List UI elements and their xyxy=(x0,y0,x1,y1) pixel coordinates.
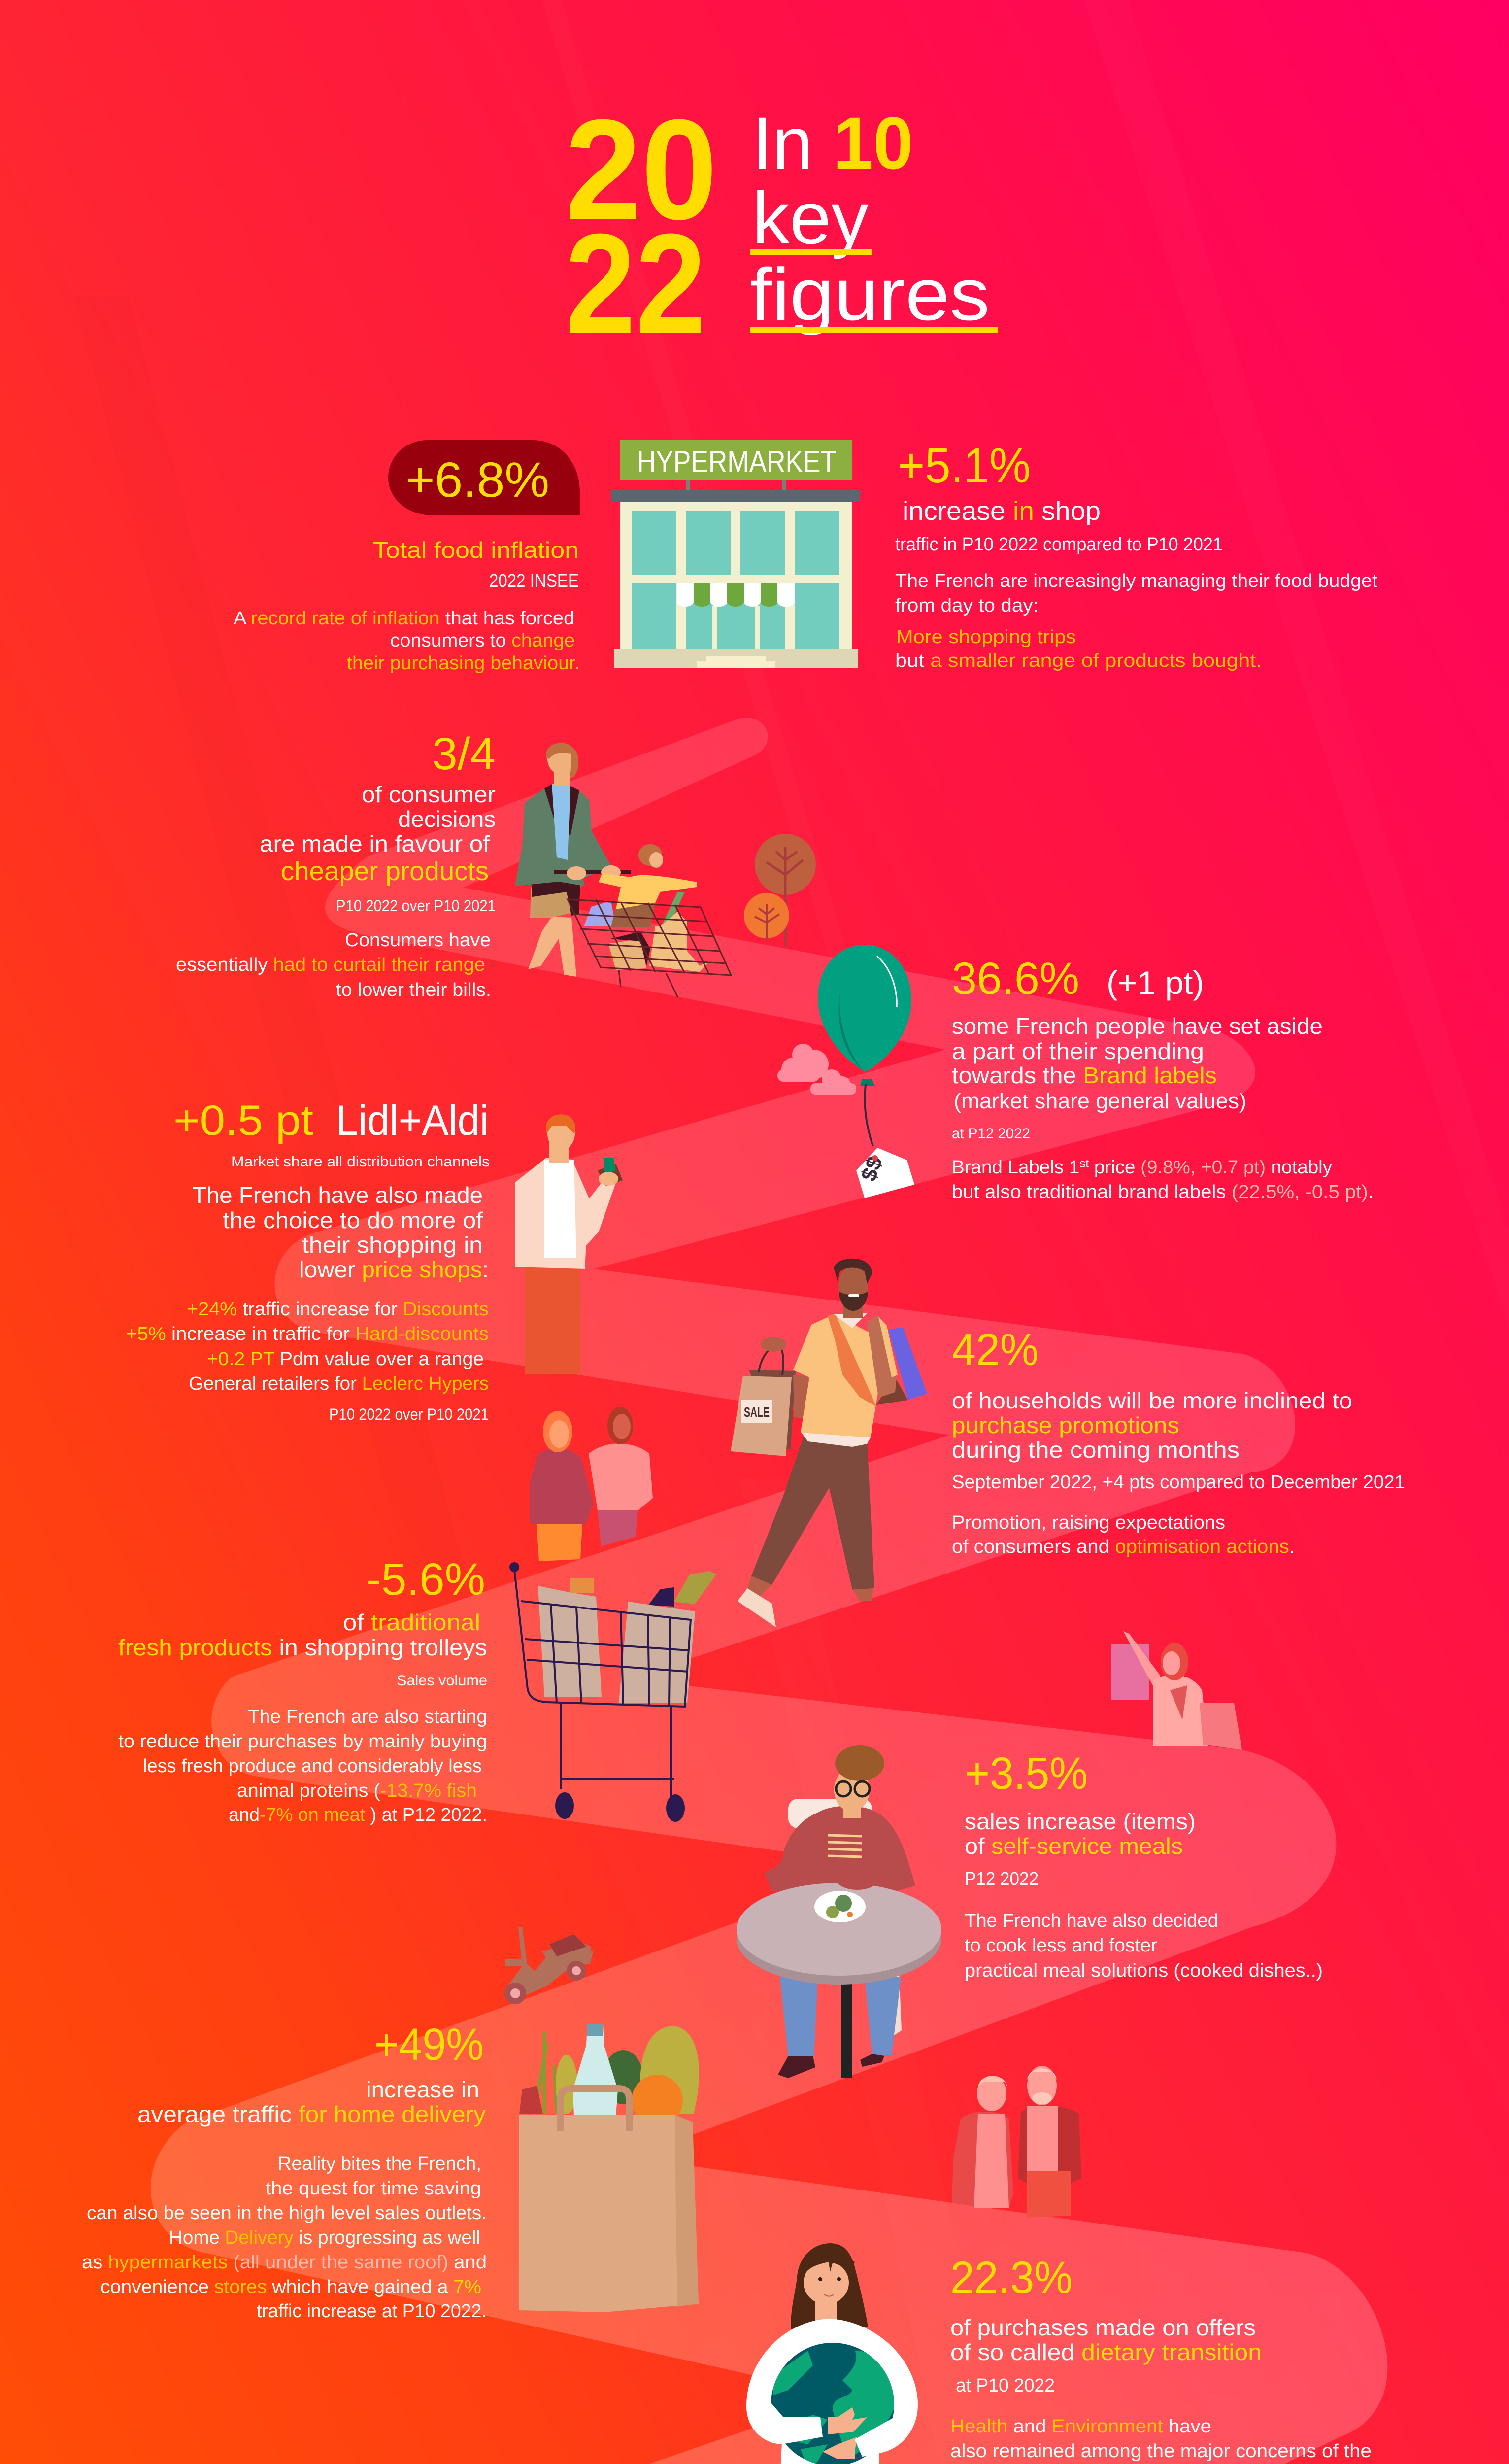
panel: home delivery: Reality bites the French, xyxy=(278,2154,481,2174)
illustration: man with shopping bags: SALE xyxy=(744,1404,770,1420)
panel: dietary transition: Health and Environment have xyxy=(950,2416,1211,2437)
panel: food inflation: Total food inflation xyxy=(373,537,579,563)
icon: hypermarket building xyxy=(611,440,860,668)
panel: brand labels: some French people have set aside xyxy=(952,1013,1323,1039)
panel: dietary transition: of purchases made on offers xyxy=(950,2315,1256,2340)
panel: home delivery: the quest for time saving xyxy=(266,2178,481,2199)
panel: brand labels: (9.8%, +0.7 pt) notably xyxy=(1140,1157,1331,1178)
panel: food inflation: 2022 INSEE xyxy=(489,571,579,591)
panel: shop traffic: increase in shop xyxy=(903,496,1101,526)
panel: Lidl and Aldi: lower price shops: xyxy=(299,1257,489,1282)
panel: dietary transition: also remained among the major concerns of the xyxy=(950,2441,1372,2462)
illustration: man with wallet xyxy=(515,1114,623,1374)
title: In 10 xyxy=(752,102,913,184)
panel: purchase promotions: purchase promotions xyxy=(952,1412,1179,1438)
illustration: man eating at table xyxy=(737,1745,941,2078)
illustration: grocery bag xyxy=(519,2024,699,2312)
panel: dietary transition: 22.3% xyxy=(950,2253,1073,2303)
panel: three quarters of consumer decisions: cheaper products xyxy=(281,856,489,886)
panel: brand labels: st xyxy=(1079,1157,1089,1170)
panel: three quarters of consumer decisions: to lower their bills. xyxy=(336,980,491,1000)
panel: brand labels: (market share general values) xyxy=(954,1089,1246,1113)
panel: brand labels xyxy=(952,954,1374,1202)
panel: food inflation xyxy=(234,440,580,674)
title: key xyxy=(752,176,869,259)
panel: food inflation: their purchasing behaviour. xyxy=(347,653,580,674)
panel: purchase promotions: of households will be more inclined to xyxy=(952,1388,1352,1413)
panel: home delivery: Home Delivery is progressing as well xyxy=(169,2227,480,2248)
panel: shop traffic: More shopping trips xyxy=(896,627,1076,648)
panel: Lidl and Aldi: +24% traffic increase for Discounts xyxy=(187,1299,489,1320)
panel: home delivery: as hypermarkets (all under the same roof) and xyxy=(82,2252,487,2273)
panel: traditional fresh products: animal proteins ( -13.7% fish xyxy=(237,1780,477,1801)
illustration: couple xyxy=(530,1407,653,1561)
panel: Lidl and Aldi: +0.2 PT Pdm value over a range xyxy=(207,1349,484,1369)
illustration: man pushing child in cart xyxy=(515,743,731,997)
panel: traditional fresh products: -5.6% xyxy=(366,1554,485,1605)
panel: three quarters of consumer decisions: Consumers have xyxy=(345,930,491,951)
panel: food inflation: A record rate of inflation that has forced xyxy=(234,608,574,629)
panel: shop traffic: from day to day: xyxy=(895,595,1039,616)
illustration: shopping trolley xyxy=(509,1562,716,1822)
panel: three quarters of consumer decisions: 3/4 xyxy=(432,729,496,779)
panel: self-service meals: practical meal solutions (cooked dishes..) xyxy=(965,1960,1323,1981)
panel: traditional fresh products: to reduce their purchases by mainly buying xyxy=(118,1731,487,1752)
title: 22 xyxy=(565,204,706,364)
panel: brand labels: (+1 pt) xyxy=(1107,964,1204,1001)
panel: Lidl and Aldi: Lidl+Aldi xyxy=(336,1097,489,1144)
illustration: green balloon with price tag xyxy=(818,945,915,1198)
panel: three quarters of consumer decisions: decisions xyxy=(398,806,496,832)
illustration: man with shopping bags xyxy=(731,1259,927,1627)
panel: three quarters of consumer decisions: of consumer xyxy=(362,782,496,807)
panel: Lidl and Aldi: The French have also made xyxy=(192,1182,483,1208)
zigzag ribbon path xyxy=(0,718,1387,2464)
panel: brand labels: but also traditional brand labels (22.5%, -0.5 pt) . xyxy=(952,1182,1374,1202)
panel: purchase promotions: September 2022, +4 pts compared to December 2021 xyxy=(952,1472,1405,1493)
panel: brand labels: Brand Labels 1 xyxy=(952,1157,1078,1178)
panel: purchase promotions: of consumers and optimisation actions . xyxy=(952,1537,1295,1557)
title xyxy=(565,90,998,364)
panel: brand labels: 36.6% xyxy=(952,954,1079,1004)
panel: Lidl and Aldi: their shopping in xyxy=(302,1232,483,1258)
panel: three quarters of consumer decisions: essentially had to curtail their range xyxy=(176,955,485,975)
panel: purchase promotions xyxy=(952,1325,1405,1557)
panel: home delivery: increase in xyxy=(366,2077,479,2102)
panel: self-service meals: The French have also decided xyxy=(965,1911,1218,1931)
illustration: woman carrying bags xyxy=(1111,1631,1242,1750)
panel: three quarters of consumer decisions xyxy=(176,729,496,1000)
panel: home delivery: traffic increase at P10 2022. xyxy=(257,2301,487,2322)
panel: traditional fresh products: The French are also starting xyxy=(248,1707,487,1727)
panel: purchase promotions: Promotion, raising expectations xyxy=(952,1512,1225,1533)
panel: shop traffic: traffic in P10 2022 compared to P10 2021 xyxy=(895,534,1223,555)
panel: dietary transition: of so called dietary transition xyxy=(950,2339,1262,2365)
panel: traditional fresh products: less fresh produce and considerably less xyxy=(143,1756,482,1777)
illustration: scooter xyxy=(504,1927,593,2004)
panel: dietary transition xyxy=(950,2253,1372,2464)
panel: traditional fresh products: Sales volume xyxy=(397,1673,487,1689)
panel: self-service meals xyxy=(965,1748,1323,1981)
panel: shop traffic: The French are increasingly managing their food budget xyxy=(895,571,1377,591)
panel: Lidl and Aldi: +0.5 pt xyxy=(173,1097,313,1144)
panel: home delivery: can also be seen in the high level sales outlets. xyxy=(87,2203,487,2224)
illustration: elderly couple xyxy=(952,2066,1081,2218)
panel: traditional fresh products: fresh products in shopping trolleys xyxy=(118,1635,487,1660)
panel: home delivery: average traffic for home delivery xyxy=(137,2101,486,2127)
panel: brand labels: price xyxy=(1089,1157,1140,1178)
panel: food inflation: consumers to change xyxy=(390,630,575,651)
panel: Lidl and Aldi: Market share all distribution channels xyxy=(231,1154,490,1170)
panel: Lidl and Aldi: the choice to do more of xyxy=(223,1207,483,1233)
panel: self-service meals: to cook less and foster xyxy=(965,1935,1157,1956)
icon: hypermarket building: HYPERMARKET xyxy=(637,445,837,479)
panel: home delivery: +49% xyxy=(374,2019,484,2070)
panel: home delivery: convenience stores which have gained a 7% xyxy=(101,2277,481,2297)
panel: purchase promotions: 42% xyxy=(952,1325,1039,1375)
panel: brand labels: towards the Brand labels xyxy=(952,1062,1217,1088)
panel: self-service meals: sales increase (items) xyxy=(965,1809,1196,1834)
panel: Lidl and Aldi: +5% increase in traffic for Hard-discounts xyxy=(126,1324,489,1344)
panel: self-service meals: P12 2022 xyxy=(965,1869,1039,1889)
illustration: clouds xyxy=(777,1044,856,1095)
panel: shop traffic: +5.1% xyxy=(898,438,1031,493)
panel: shop traffic: but a smaller range of products bought. xyxy=(895,650,1262,671)
panel: self-service meals: +3.5% xyxy=(965,1748,1088,1799)
panel: Lidl and Aldi xyxy=(126,1097,490,1423)
panel: brand labels: at P12 2022 xyxy=(952,1126,1030,1142)
panel: food inflation: +6.8% xyxy=(405,452,549,508)
panel: three quarters of consumer decisions: are made in favour of xyxy=(260,831,490,856)
panel: Lidl and Aldi: General retailers for Leclerc Hypers xyxy=(189,1373,489,1394)
title: figures xyxy=(750,253,990,336)
panel: self-service meals: of self-service meals xyxy=(965,1833,1183,1859)
title: 20 xyxy=(565,90,717,249)
panel: home delivery xyxy=(82,2019,487,2322)
panel: brand labels: a part of their spending xyxy=(952,1038,1204,1064)
panel: purchase promotions: during the coming months xyxy=(952,1437,1240,1463)
panel: three quarters of consumer decisions: P10 2022 over P10 2021 xyxy=(336,897,496,915)
panel: traditional fresh products xyxy=(118,1554,487,1825)
illustration: woman hugging globe xyxy=(746,2243,918,2464)
panel: dietary transition: at P10 2022 xyxy=(956,2375,1055,2396)
illustration: green balloon with price tag: $$ xyxy=(856,1154,887,1184)
panel: shop traffic xyxy=(895,438,1377,671)
panel: Lidl and Aldi: P10 2022 over P10 2021 xyxy=(329,1405,489,1423)
illustration: autumn trees xyxy=(744,834,816,946)
panel: traditional fresh products: of traditional xyxy=(343,1609,480,1635)
panel: traditional fresh products: and-7% on meat ) at P12 2022. xyxy=(229,1805,487,1825)
